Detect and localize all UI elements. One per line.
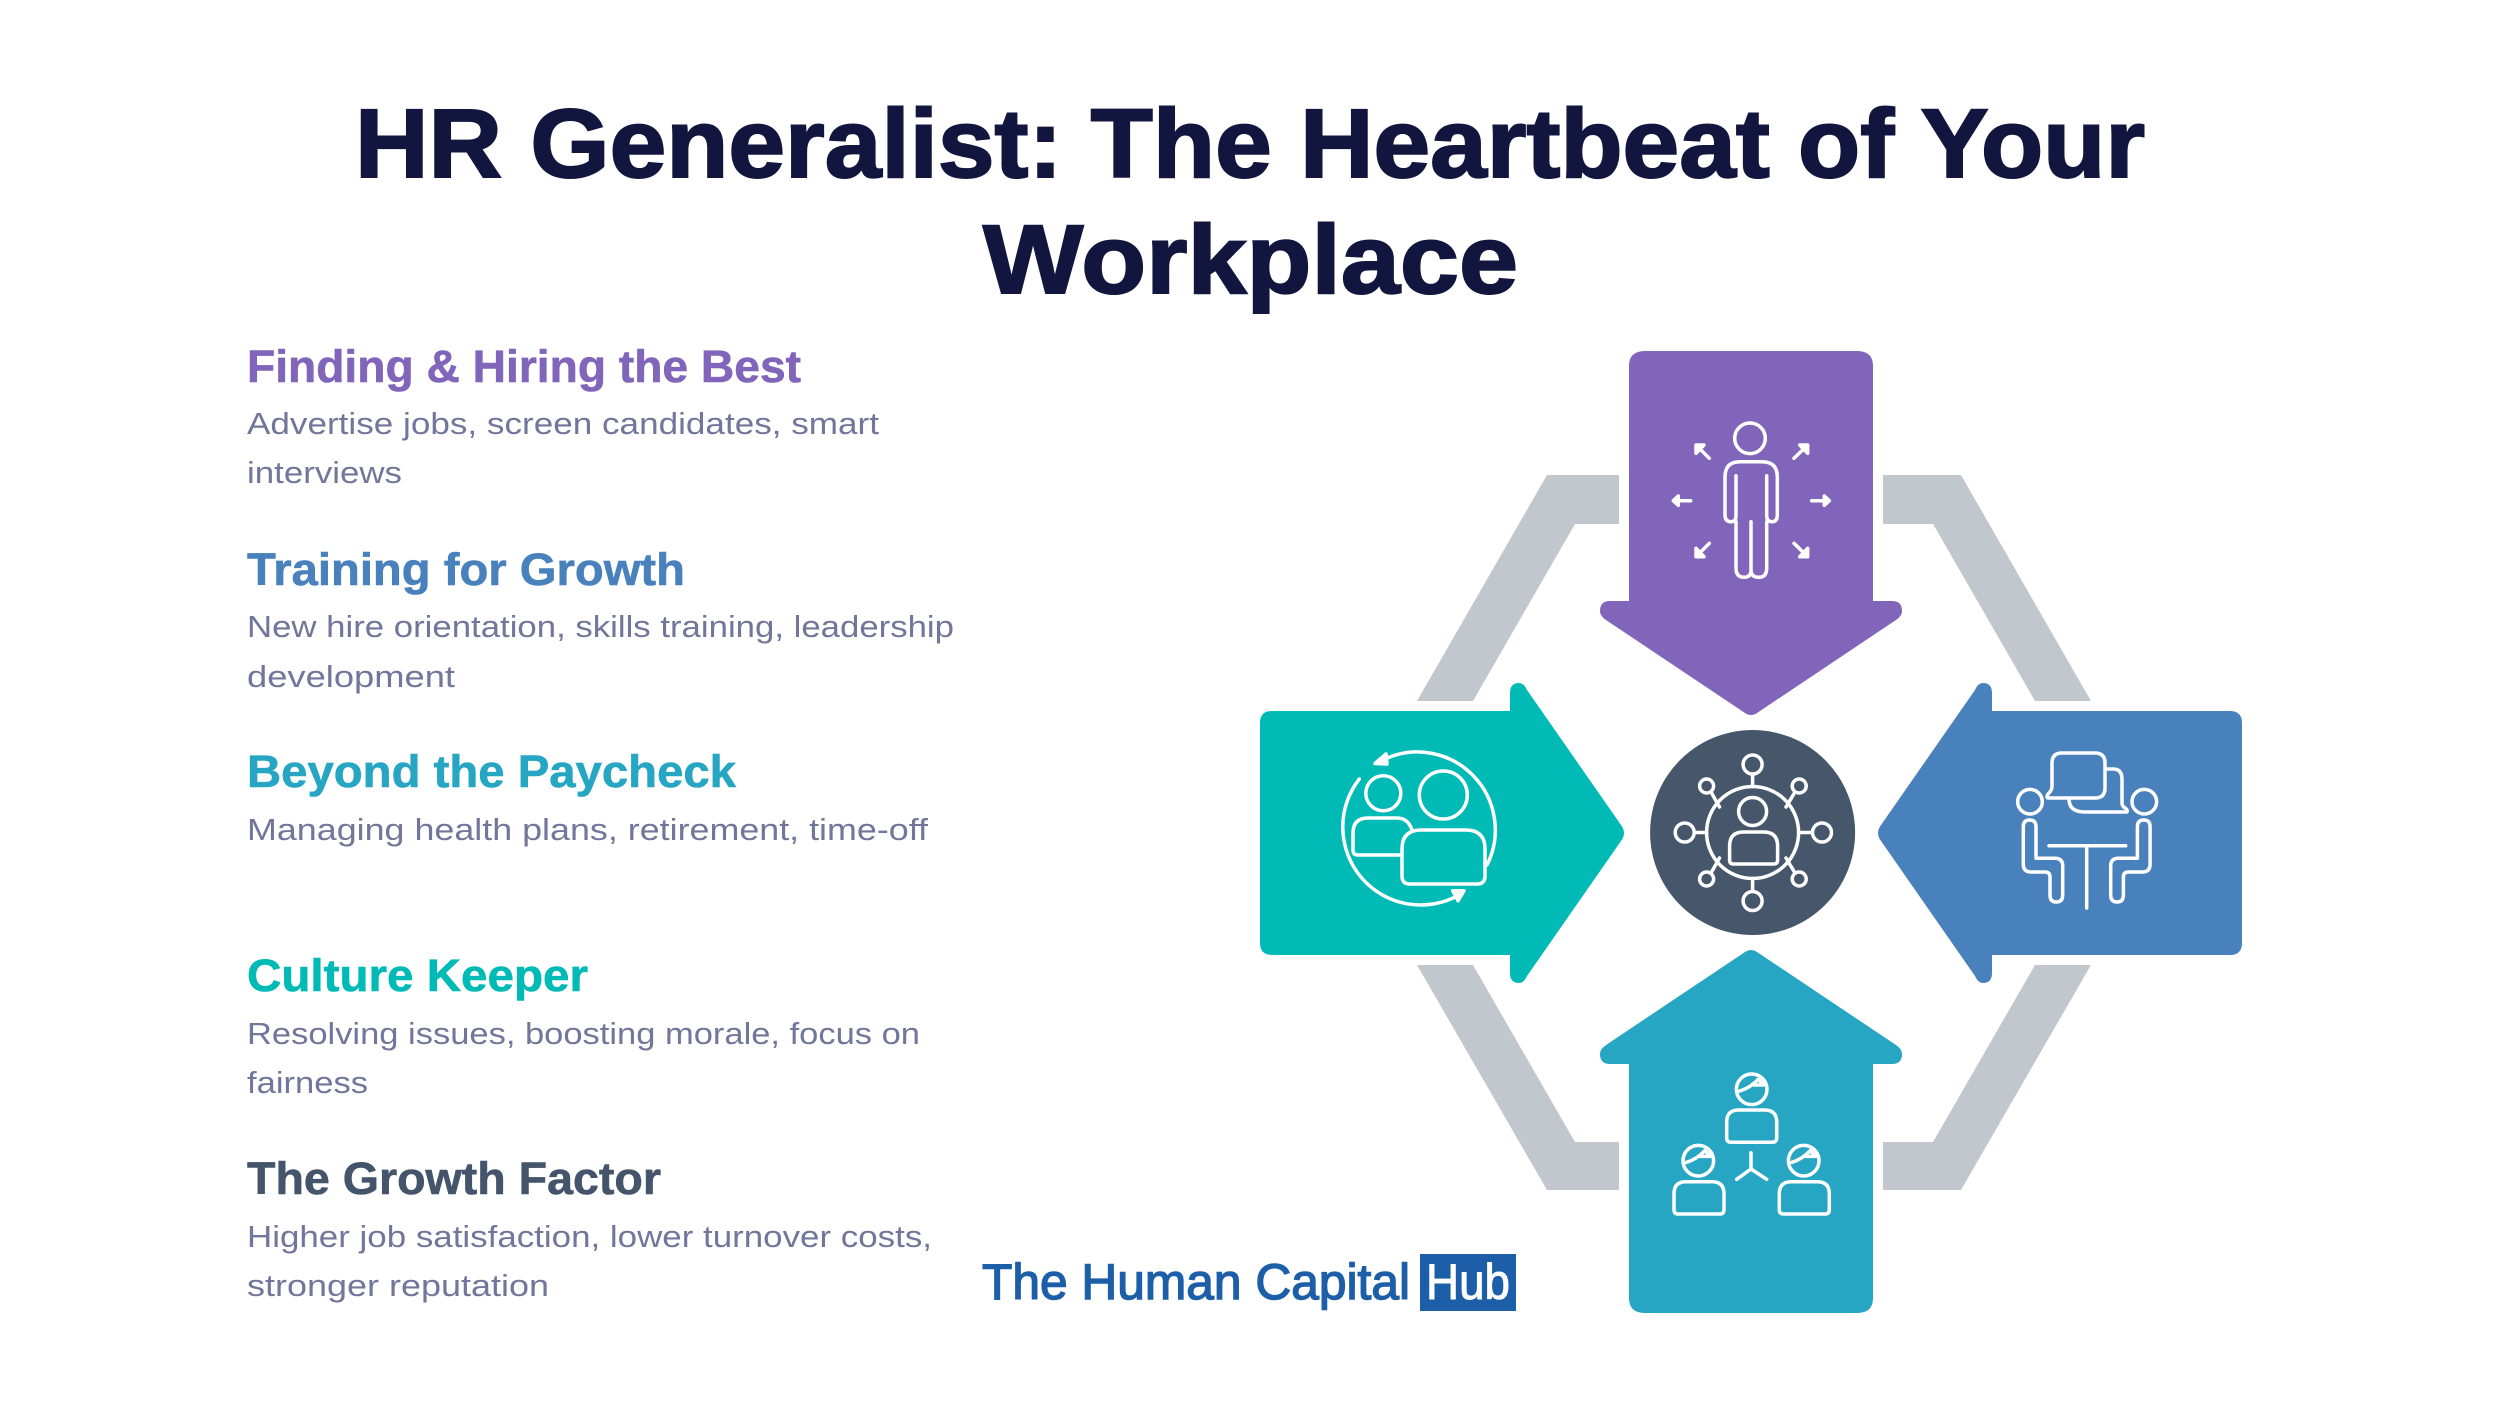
panel: Finding & Hiring the Best	[247, 341, 879, 490]
heading: The Growth Factor: The Growth Factor	[247, 1153, 661, 1204]
hub circle	[1650, 730, 1855, 935]
panel: Beyond the Paycheck	[247, 746, 928, 847]
panel: The Growth Factor	[247, 1153, 932, 1303]
text block: hiring description: interviews	[247, 455, 402, 490]
text block: hiring description	[247, 406, 879, 490]
text block: culture description: fairness	[247, 1065, 368, 1100]
text block: hiring description: Advertise jobs, screen candidates, smart	[247, 406, 879, 441]
logo: The Human Capital Hub: Hub	[1426, 1254, 1510, 1310]
heading: Training for Growth: Training for Growth	[247, 544, 685, 595]
text block: training description: development	[247, 659, 455, 694]
arrow: teal pointing right	[1260, 683, 1624, 983]
text block: training description	[247, 609, 954, 694]
icon: central person network	[1675, 755, 1832, 910]
icon: person with radiating arrows	[1673, 423, 1829, 577]
title: HR Generalist: The Heartbeat of Your	[355, 89, 2145, 198]
icon: two people talking at a table	[2018, 753, 2157, 908]
panel: Training for Growth	[247, 544, 954, 694]
text block: training description: New hire orientation, skills training, leadership	[247, 609, 954, 644]
logo: The Human Capital Hub: The Human Capital	[982, 1254, 1410, 1310]
connector: top right	[1883, 475, 2091, 701]
text block: culture description	[247, 1016, 920, 1100]
icon: three people connected	[1674, 1074, 1829, 1214]
panel: Culture Keeper	[247, 950, 920, 1100]
connector: top left	[1417, 475, 1619, 701]
connector: bottom right	[1883, 965, 2091, 1190]
heading: Beyond the Paycheck: Beyond the Paycheck	[247, 746, 737, 797]
text block: growth description: Higher job satisfaction, lower turnover costs,	[247, 1219, 932, 1254]
text block: growth description: stronger reputation	[247, 1268, 549, 1303]
arrow: purple pointing down	[1600, 351, 1902, 715]
connector: bottom left	[1417, 965, 1619, 1190]
arrow: blue pointing left	[1878, 683, 2242, 983]
text block: growth description	[247, 1219, 932, 1303]
arrow: teal-blue pointing up	[1600, 950, 1902, 1313]
heading: Finding & Hiring the Best: Finding & Hiring the Best	[247, 341, 801, 392]
title: Workplace	[983, 205, 1518, 314]
text block: benefits description: Managing health plans, retirement, time-off	[247, 812, 928, 847]
heading: Culture Keeper: Culture Keeper	[247, 950, 588, 1001]
text block: culture description: Resolving issues, boosting morale, focus on	[247, 1016, 920, 1051]
icon: two people with cycle arrows	[1343, 752, 1495, 905]
title	[355, 89, 2145, 314]
